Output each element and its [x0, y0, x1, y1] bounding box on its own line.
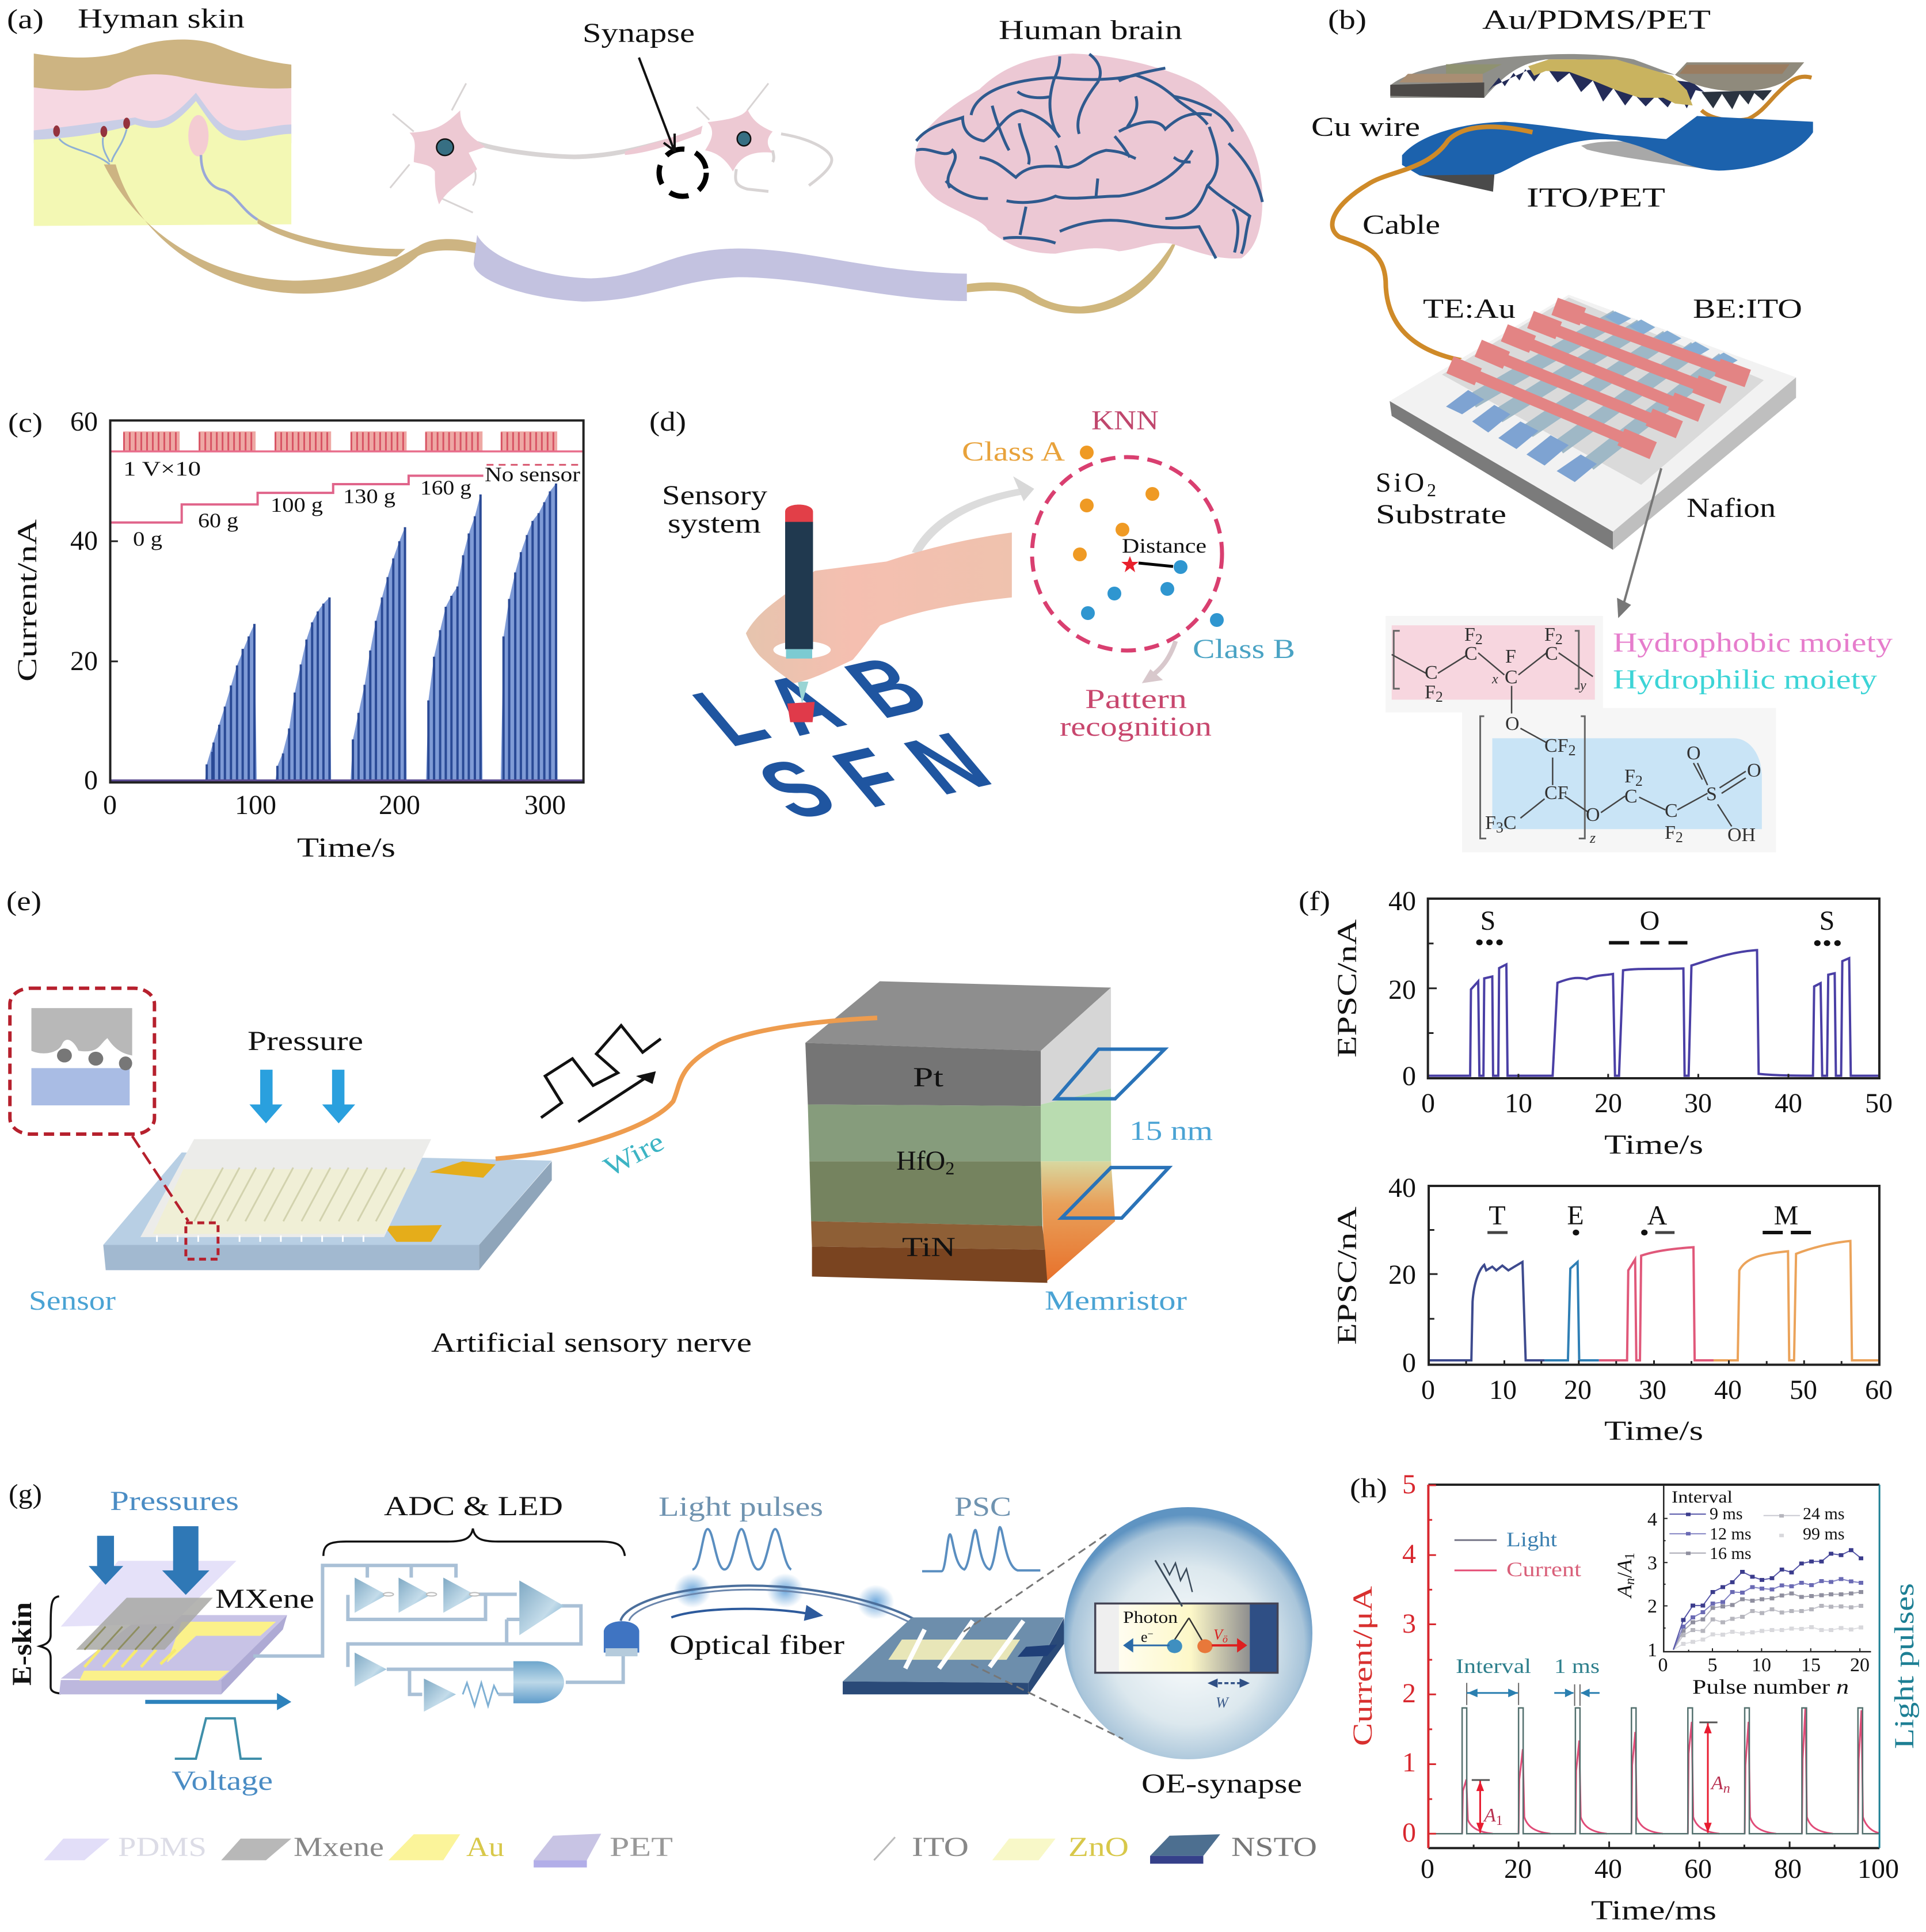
written letters LAB SFN: B: [826, 640, 947, 735]
legend: Light: Light: [1506, 1528, 1557, 1551]
plot frame and traces: [1429, 1186, 1879, 1365]
y ticks: 0: [1402, 1061, 1416, 1091]
label: BE:ITO: BE:ITO: [1693, 294, 1802, 324]
PSC waveform: [922, 1527, 1040, 1571]
written letters LAB SFN: S: [738, 742, 855, 836]
inset y title: A: [1613, 1559, 1636, 1573]
x axis ticks: 300: [524, 790, 566, 820]
layer label: Pt: Pt: [913, 1062, 944, 1093]
panel h: light pulse response chart: [1348, 1469, 1920, 1926]
label: KNN: KNN: [1091, 405, 1159, 436]
x ticks: 20: [1504, 1854, 1532, 1884]
inset y ticks: 1: [1647, 1640, 1657, 1661]
pressure arrows: [89, 1526, 210, 1595]
legend text: ITO: [912, 1832, 969, 1862]
letters: [1480, 906, 1834, 936]
inset x ticks: 0: [1658, 1655, 1668, 1676]
annotation labels: 1 V×10: [123, 457, 201, 480]
molecule atom labels: 2: [1436, 689, 1443, 705]
legend text: PET: [610, 1832, 673, 1862]
magnified orb: [1064, 1507, 1312, 1759]
legend text: [118, 1832, 1317, 1862]
x ticks: 20: [1594, 1088, 1622, 1119]
orb labels: −: [1148, 1628, 1154, 1640]
x ticks: 60: [1865, 1375, 1893, 1405]
inset x ticks: 10: [1752, 1655, 1771, 1676]
band diagram inside orb: [1095, 1560, 1278, 1688]
sensor device: [103, 1139, 552, 1270]
E-skin brace: [40, 1596, 61, 1694]
voltage pulse icon: [175, 1718, 262, 1759]
heading: Hyman skin: Hyman skin: [78, 3, 245, 34]
molecule atom labels: F: [1544, 624, 1555, 645]
y axis ticks: 40: [70, 526, 98, 556]
panel label g: (g): [9, 1479, 42, 1509]
panel a: skin to brain pathway: [7, 3, 1262, 314]
written letters LAB SFN: F: [814, 731, 927, 824]
letters: M: [1774, 1200, 1798, 1231]
legend: Current: Current: [1506, 1558, 1581, 1581]
legend text: NSTO: [1231, 1832, 1317, 1862]
light pulses waveform: [692, 1529, 791, 1569]
inset legend: 16 ms: [1710, 1544, 1752, 1563]
layer label: HfO2: 2: [945, 1158, 954, 1178]
gray arrow to pattern recognition: [1142, 641, 1175, 683]
y axis ticks: 20: [70, 646, 98, 676]
molecule atom labels: O: [1687, 743, 1701, 764]
molecule atom labels: F: [1665, 822, 1676, 843]
x ticks: 60: [1684, 1854, 1712, 1884]
annotation labels: 0 g: [133, 527, 162, 550]
x ticks: 50: [1865, 1088, 1893, 1119]
molecule atom labels: F: [1505, 646, 1516, 667]
x ticks: 80: [1774, 1854, 1802, 1884]
red y ticks: 4: [1402, 1539, 1416, 1569]
distance line and star: [1121, 556, 1173, 572]
x axis ticks: 0: [103, 790, 117, 820]
written letters LAB SFN: N: [885, 716, 1010, 812]
top sheet and teeth: [1390, 54, 1811, 120]
x ticks: 10: [1489, 1375, 1517, 1405]
panel label d: (d): [649, 406, 686, 437]
molecule atom labels: 2: [1475, 631, 1483, 648]
panel g: OE synapse system: [7, 1479, 1317, 1868]
optical fiber with glow: [621, 1573, 954, 1653]
molecule atom labels: 2: [1569, 742, 1576, 759]
molecule atom labels: O: [1505, 713, 1520, 735]
inset y ticks: 2: [1647, 1596, 1657, 1617]
y title: EPSC/nA: [1332, 1207, 1362, 1345]
orb labels: [1123, 1608, 1230, 1711]
molecule atom labels: 2: [1676, 829, 1683, 846]
legend text: Mxene: [294, 1832, 384, 1862]
letters: [1489, 1200, 1798, 1231]
molecule atom labels: O: [1747, 760, 1761, 781]
y ticks: 40: [1388, 1173, 1416, 1203]
label: Memristor: Memristor: [1045, 1286, 1187, 1316]
main plot traces and frame: [1428, 1485, 1879, 1848]
molecule atom labels: F: [1464, 624, 1475, 645]
label: Cu wire: Cu wire: [1311, 112, 1420, 142]
label: A1: A: [1484, 1805, 1496, 1826]
bottom blue sheet: [1402, 116, 1813, 192]
x axis title: Time/s: [297, 832, 395, 863]
heading: Synapse: Synapse: [583, 18, 695, 48]
ADC and LED circuit: [253, 1565, 623, 1712]
inset legend: 12 ms: [1710, 1524, 1752, 1543]
y ticks: 20: [1388, 975, 1416, 1005]
heading: Human brain: Human brain: [999, 15, 1182, 45]
layer label: TiN: TiN: [902, 1232, 956, 1262]
label: PSC: PSC: [954, 1492, 1011, 1522]
inset x title: Pulse number n: [1692, 1675, 1849, 1698]
inset x ticks: 5: [1707, 1655, 1718, 1676]
x ticks: 0: [1421, 1088, 1435, 1119]
inset legend: 99 ms: [1803, 1524, 1845, 1543]
panel label c: (c): [8, 408, 43, 438]
x axis ticks: 100: [235, 790, 276, 820]
label: Light pulses: Light pulses: [659, 1492, 823, 1522]
x ticks: 100: [1858, 1854, 1899, 1884]
swatches: [44, 1834, 1220, 1868]
label: Cable: Cable: [1362, 210, 1440, 240]
annotation labels: 60 g: [198, 509, 238, 532]
label: Voltage: Voltage: [172, 1766, 273, 1796]
letters: T: [1489, 1200, 1506, 1231]
label: Wire: Wire: [599, 1126, 669, 1183]
x axis ticks: [103, 790, 566, 820]
molecule atom labels: z: [1589, 830, 1596, 846]
label: MXene: MXene: [215, 1584, 314, 1614]
skin cross-section illustration: [34, 40, 291, 226]
Nafion molecule backgrounds: [1385, 616, 1776, 852]
panel label a: (a): [7, 4, 44, 35]
y ticks: [1388, 886, 1416, 1091]
x ticks: 40: [1775, 1088, 1802, 1119]
inset y ticks: [1647, 1509, 1657, 1661]
hand holding pen: [746, 504, 1012, 722]
molecule atom labels: S: [1706, 784, 1717, 805]
label: Sensor: Sensor: [29, 1286, 116, 1316]
label: Hydrophobic moiety: Hydrophobic moiety: [1613, 627, 1893, 658]
molecule atom labels: C: [1464, 643, 1478, 664]
right title: Light pulses: Light pulses: [1889, 1583, 1920, 1749]
molecule atom labels: C: [1504, 812, 1517, 834]
label: ADC & LED: ADC & LED: [384, 1491, 563, 1522]
y title: Current: Current/μA: [1348, 1586, 1378, 1746]
label: An: n: [1723, 1781, 1730, 1796]
material legend: [44, 1832, 1317, 1868]
legend lines: [1455, 1540, 1497, 1570]
x axis ticks: 200: [379, 790, 420, 820]
brain: [915, 54, 1262, 258]
x ticks: [1421, 1854, 1899, 1884]
annotation arrows: [1467, 1683, 1718, 1833]
x ticks: 30: [1639, 1375, 1666, 1405]
molecule atom labels: 2: [1555, 631, 1563, 648]
label: Class B: Class B: [1193, 634, 1295, 664]
orange cable: [1333, 127, 1532, 361]
sensory nerve fibres: [104, 165, 1175, 314]
inset y ticks: 3: [1647, 1553, 1657, 1574]
label: Pressures: Pressures: [110, 1486, 239, 1516]
red y ticks: 5: [1402, 1469, 1416, 1500]
inset axes and series: [1664, 1485, 1871, 1652]
x ticks: 0: [1421, 1375, 1435, 1405]
annotation labels: [123, 457, 580, 550]
annotation labels: 100 g: [271, 493, 323, 516]
voltage arrow: [145, 1693, 291, 1710]
letters: A: [1647, 1200, 1668, 1231]
panel f: EPSC charts: [1299, 886, 1893, 1446]
arrow from Nafion to molecule: [1617, 468, 1661, 618]
orb labels: ö: [1223, 1633, 1228, 1645]
x ticks: 0: [1421, 1854, 1434, 1884]
orb labels: e: [1141, 1629, 1148, 1645]
gray arrow to classifier: [912, 476, 1034, 554]
annotation labels: 160 g: [420, 476, 471, 499]
KNN dashed boundary: [1032, 457, 1222, 651]
x title: Time/ms: [1591, 1895, 1716, 1926]
y ticks: [1388, 1173, 1416, 1378]
letters: S: [1820, 906, 1834, 936]
legend text: Au: [466, 1832, 504, 1862]
legend text: PDMS: [118, 1832, 207, 1862]
molecule atom labels: C: [1425, 662, 1438, 683]
label: Pressure: Pressure: [248, 1026, 363, 1056]
label: Distance: Distance: [1122, 534, 1206, 557]
bottom chart: TEAM: [1332, 1173, 1893, 1446]
molecule atom labels: O: [1586, 804, 1600, 826]
inset x ticks: [1658, 1655, 1870, 1676]
label: A1: 1: [1496, 1813, 1503, 1828]
class B dots: [1081, 560, 1224, 627]
caption: Artificial sensory nerve: Artificial sensory nerve: [431, 1328, 752, 1358]
label: Pattern recognition: recognition: [1060, 712, 1212, 742]
synapse arrow: [639, 58, 675, 151]
x ticks: 50: [1790, 1375, 1817, 1405]
y axis title: Current/nA: [12, 519, 43, 682]
x ticks: 40: [1714, 1375, 1742, 1405]
molecule atom labels: 3: [1496, 819, 1504, 836]
e-skin layered device: [59, 1561, 287, 1694]
label: Optical fiber: Optical fiber: [669, 1630, 844, 1660]
y ticks: 0: [1402, 1348, 1416, 1378]
x ticks: [1421, 1375, 1893, 1405]
label: Substrate: Substrate: [1376, 499, 1506, 530]
letters: O: [1640, 906, 1659, 936]
label: Sensory system: system: [668, 508, 761, 539]
label: Pattern recognition: [1060, 684, 1212, 742]
synapse chip: [843, 1534, 1123, 1739]
label: ITO/PET: ITO/PET: [1527, 182, 1665, 213]
label: SiO2: SiO: [1376, 467, 1424, 498]
x title: Time/s: [1604, 1416, 1703, 1446]
inset y ticks: 4: [1647, 1509, 1657, 1530]
panel label b: (b): [1328, 5, 1367, 35]
y axis ticks: [70, 406, 98, 796]
letters: S: [1480, 906, 1495, 936]
inset chart: [1613, 1485, 1871, 1698]
molecule atom labels: C: [1505, 667, 1518, 688]
written letters LAB SFN: L: [674, 670, 787, 763]
y axis ticks: 0: [84, 765, 98, 796]
signal pulse icon and arrow: [541, 1025, 661, 1122]
label: Interval: Interval: [1456, 1655, 1531, 1678]
orange wire: [496, 1018, 877, 1159]
written letters LAB SFN: [674, 640, 1010, 836]
panel label h: (h): [1350, 1473, 1387, 1504]
molecule atom labels: F: [1624, 766, 1635, 787]
molecule atom labels: 2: [1635, 773, 1643, 789]
written letters LAB SFN: A: [741, 657, 863, 752]
inset x ticks: 15: [1801, 1655, 1821, 1676]
chart frame, traces and pulses: [111, 420, 584, 782]
label: TE:Au: TE:Au: [1423, 294, 1516, 324]
label: Hydrophilic moiety: Hydrophilic moiety: [1613, 664, 1877, 695]
molecule atom labels: F: [1485, 812, 1496, 834]
class A dots: [1073, 446, 1159, 561]
panel c: current vs time chart: [8, 406, 584, 863]
inset y title: 1: [1623, 1553, 1638, 1560]
molecule atom labels: C: [1624, 786, 1638, 807]
crossbar array on substrate: [1390, 295, 1796, 550]
label: Sensory system: [662, 480, 767, 539]
annotation labels: 130 g: [343, 485, 395, 508]
inset y title: A: [1613, 1584, 1636, 1599]
y title: EPSC/nA: [1332, 919, 1362, 1058]
letters: E: [1567, 1200, 1584, 1231]
molecule atom labels: F: [1425, 682, 1436, 703]
molecule atom labels: C: [1665, 800, 1678, 822]
molecule atom labels: y: [1579, 678, 1586, 693]
label: 15 nm: 15 nm: [1129, 1116, 1213, 1146]
y axis ticks: 60: [70, 406, 98, 437]
molecule atom labels: OH: [1727, 824, 1756, 846]
panel d: handwriting and KNN recognition: [649, 405, 1295, 836]
label: Nafion: Nafion: [1687, 493, 1776, 523]
red y ticks: 0: [1402, 1817, 1416, 1848]
panel b: pressure sensor array: [1311, 5, 1893, 852]
LED: [604, 1621, 640, 1656]
pressure arrows: [249, 1070, 355, 1123]
x ticks: 10: [1505, 1088, 1532, 1119]
inset legend: [1672, 1488, 1845, 1563]
panel label f: (f): [1299, 886, 1330, 916]
x title: Time/s: [1604, 1129, 1703, 1160]
orb labels: V: [1213, 1626, 1223, 1643]
label: OE-synapse: OE-synapse: [1141, 1769, 1302, 1799]
annotation labels: No sensor: [485, 463, 580, 486]
molecule atom labels: C: [1545, 643, 1558, 664]
label: Pattern recognition: Pattern: [1085, 684, 1187, 714]
red y ticks: 2: [1402, 1678, 1416, 1709]
label: E-skin: E-skin: [7, 1602, 37, 1686]
layer label: HfO2: HfO: [896, 1146, 945, 1176]
zoom inset, dashed: [10, 988, 218, 1259]
label: Sensory system: Sensory: [662, 480, 767, 511]
x ticks: 20: [1564, 1375, 1592, 1405]
inset legend: 24 ms: [1803, 1504, 1845, 1523]
label: SiO2: 2: [1427, 480, 1436, 500]
label: 1 ms: 1 ms: [1554, 1655, 1600, 1678]
neurons: [390, 83, 832, 212]
red y ticks: 3: [1402, 1608, 1416, 1639]
molecule atom labels: CF: [1544, 782, 1569, 804]
inset x ticks: 20: [1850, 1655, 1870, 1676]
molecule atom labels: CF: [1544, 735, 1569, 756]
inset y title: /: [1613, 1572, 1636, 1578]
inset y title: n: [1623, 1578, 1638, 1585]
orb labels: W: [1216, 1694, 1230, 1711]
label: An: A: [1711, 1773, 1723, 1794]
x ticks: [1421, 1088, 1893, 1119]
inset legend: Interval: [1672, 1488, 1733, 1507]
legend text: ZnO: [1068, 1832, 1129, 1862]
y ticks: 40: [1388, 886, 1416, 916]
ADC brace: [323, 1528, 625, 1556]
panel e: artificial sensory nerve: [6, 886, 1213, 1358]
molecule atom labels: [1425, 624, 1761, 846]
plot frame and trace: [1428, 899, 1879, 1078]
memristor stack: [805, 982, 1169, 1283]
top chart: SOS: [1332, 886, 1893, 1160]
synapse marker: dashed circle: [659, 149, 706, 196]
y ticks: 20: [1388, 1260, 1416, 1290]
panel label e: (e): [6, 886, 41, 916]
inset legend: 9 ms: [1710, 1504, 1743, 1523]
x ticks: 40: [1594, 1854, 1622, 1884]
label: Class A: Class A: [962, 436, 1065, 467]
label: Au/PDMS/PET: Au/PDMS/PET: [1482, 5, 1711, 35]
red y ticks: [1402, 1469, 1416, 1848]
molecule atom labels: x: [1491, 672, 1498, 687]
red y ticks: 1: [1402, 1747, 1416, 1778]
x ticks: 30: [1684, 1088, 1712, 1119]
orb labels: Photon: [1123, 1608, 1178, 1627]
